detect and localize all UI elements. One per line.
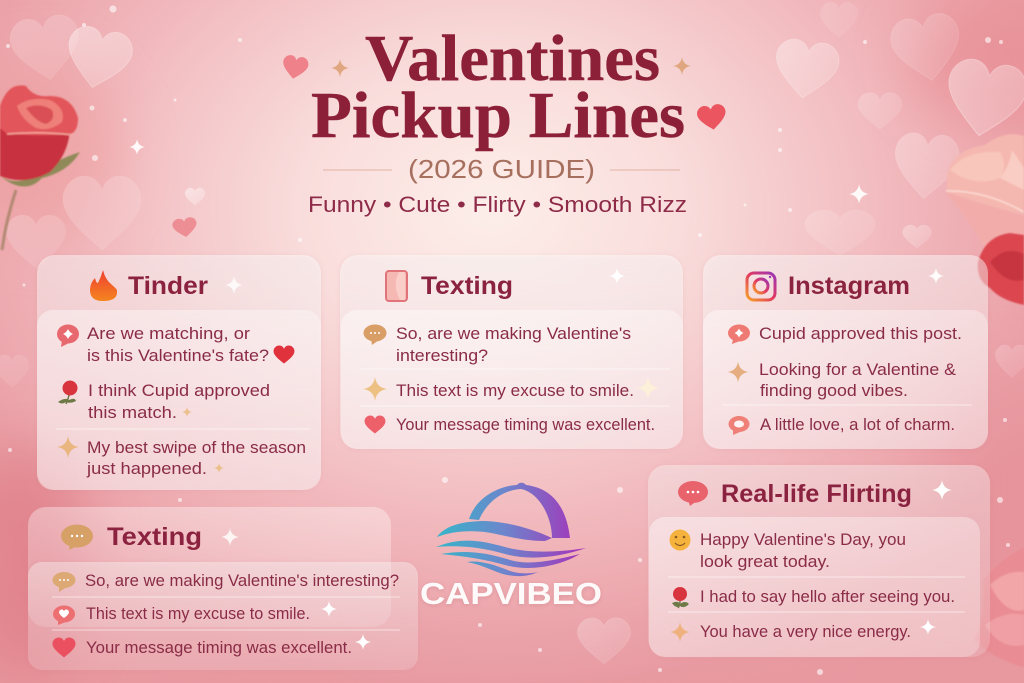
icon: small sparkle bbox=[182, 407, 192, 417]
heading: Real-life Flirting: Real-life Flirting bbox=[721, 480, 912, 508]
icon: tan speech bubble bbox=[364, 324, 386, 345]
panel: Texting bottom bbox=[28, 507, 418, 670]
icon: sparkle bbox=[355, 634, 371, 650]
text: line 3: You have a very nice energy. bbox=[700, 622, 911, 641]
icon: phone bbox=[386, 271, 407, 301]
heading: Instagram: Instagram bbox=[788, 272, 910, 300]
text: line 2: I think Cupid approved bbox=[88, 381, 270, 400]
text: line 3: Your message timing was excellent. bbox=[86, 638, 352, 657]
text: line 1: Happy Valentine's Day, you bbox=[700, 530, 906, 549]
text: line 1: So, are we making Valentine's bbox=[396, 324, 631, 343]
rose: right pink bbox=[945, 134, 1024, 250]
icon: header sparkle bbox=[928, 268, 944, 284]
text: line 3: Your message timing was excellent. bbox=[396, 415, 655, 434]
text: line 1: interesting? bbox=[396, 346, 488, 365]
icon: sparkle bbox=[321, 601, 337, 617]
text: line 2 bbox=[88, 381, 270, 422]
text: line 2 bbox=[759, 360, 957, 400]
icon: speech bubble star bbox=[57, 324, 79, 347]
text: line 1: Are we matching, or bbox=[87, 324, 250, 343]
icon: pale sparkle bbox=[637, 377, 659, 399]
text: wordmark: CAPVIBEO bbox=[420, 576, 602, 611]
icon: header sparkle bbox=[221, 528, 239, 546]
rose: bottom right bbox=[974, 547, 1024, 667]
logo: Capvibeo bbox=[420, 483, 602, 611]
icon: tan speech bubble bbox=[61, 524, 93, 550]
icon: heart left of title bbox=[281, 54, 310, 81]
text: line 2: This text is my excuse to smile. bbox=[396, 381, 634, 400]
panel: Tinder bbox=[37, 255, 321, 490]
icon: heart bbox=[365, 416, 385, 434]
icon: gold sparkle bbox=[728, 362, 748, 382]
text: line 3: just happened. bbox=[86, 459, 207, 478]
text: line 1: So, are we making Valentine's interesting? bbox=[85, 571, 399, 590]
icon: Instagram bbox=[747, 273, 775, 300]
text: line 3: My best swipe of the season bbox=[87, 438, 306, 457]
title block bbox=[281, 22, 728, 217]
icon: sparkle right bbox=[673, 57, 691, 75]
icon: heart right of title bbox=[696, 103, 728, 132]
icon: speech bubble smile bbox=[728, 416, 750, 435]
text: line 3 bbox=[86, 438, 306, 478]
icon: red heart bbox=[274, 346, 294, 364]
panel: Instagram bbox=[703, 255, 988, 449]
icon: small sparkle bbox=[214, 463, 224, 473]
text: line 1 bbox=[396, 324, 631, 365]
icon: sparkle bbox=[920, 619, 936, 635]
icon: background sparkles bbox=[129, 139, 869, 204]
icon: cap bbox=[436, 483, 586, 576]
icon: gold sparkle bbox=[363, 377, 387, 401]
icon: sparkle left bbox=[331, 59, 349, 77]
icon: gold sparkle bbox=[670, 622, 690, 642]
heading: Texting: Texting bbox=[107, 523, 202, 551]
text: line 1: look great today. bbox=[700, 552, 830, 571]
icon: flame bbox=[90, 270, 117, 301]
heading: Texting: Texting bbox=[421, 272, 513, 300]
text: line 1 bbox=[700, 530, 906, 571]
icon: speech bubble star bbox=[728, 324, 750, 344]
heading: title: Valentines bbox=[365, 22, 660, 95]
panel: Texting top bbox=[340, 255, 683, 449]
heading: title: Pickup Lines bbox=[311, 79, 685, 152]
text: line 2: this match. bbox=[88, 403, 177, 422]
icon: gold sparkle bbox=[57, 436, 79, 458]
icon: header sparkle bbox=[609, 268, 625, 284]
icon: header sparkle bbox=[932, 480, 952, 500]
icon: header sparkle bbox=[225, 276, 243, 294]
text: line 1: Cupid approved this post. bbox=[759, 324, 962, 343]
icon: smiley bbox=[670, 530, 690, 550]
rose: right red bbox=[978, 233, 1024, 305]
icon: small red heart in background bbox=[172, 216, 198, 239]
icon: heart bbox=[52, 638, 76, 657]
icon: tan speech bubble bbox=[52, 572, 76, 592]
subtitle: 2026 guide: (2026 GUIDE) bbox=[408, 154, 595, 184]
icon: rose bbox=[58, 380, 78, 404]
panel: Real-life Flirting bbox=[648, 465, 990, 657]
icon: speech bubble heart bbox=[53, 606, 75, 625]
text: line 2: Looking for a Valentine & bbox=[759, 360, 957, 379]
text: line 1: is this Valentine's fate? bbox=[87, 346, 269, 365]
heading: Tinder: Tinder bbox=[128, 272, 208, 300]
tagline: Funny • Cute • Flirty • Smooth Rizz bbox=[308, 192, 687, 217]
text: line 2: finding good vibes. bbox=[760, 381, 908, 400]
icon: rose bbox=[672, 587, 689, 608]
heading: title bbox=[311, 22, 685, 152]
text: line 2: This text is my excuse to smile. bbox=[86, 604, 310, 623]
text: line 3: A little love, a lot of charm. bbox=[760, 415, 955, 434]
rose: top left bbox=[0, 85, 80, 250]
text: line 2: I had to say hello after seeing you. bbox=[700, 587, 955, 606]
text: line 1 bbox=[87, 324, 269, 365]
icon: red speech bubble bbox=[678, 481, 708, 506]
